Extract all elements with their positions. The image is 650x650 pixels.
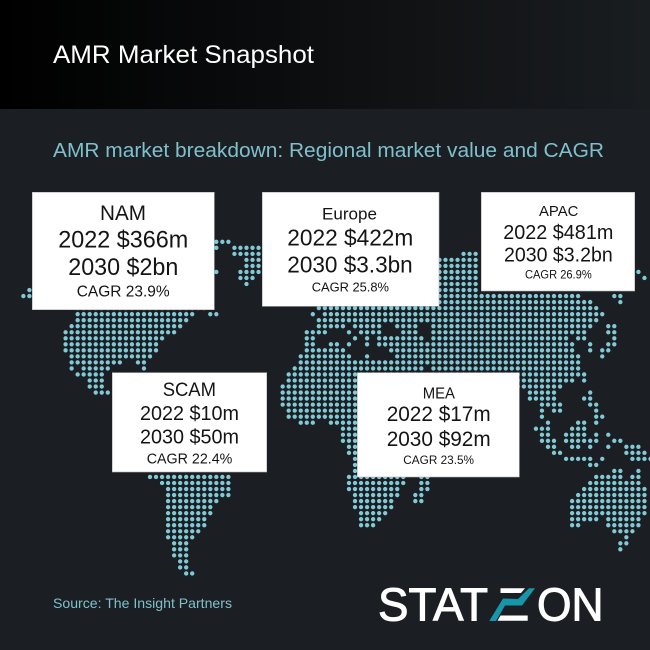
panel: APAC: CAGR 26.9% — [525, 269, 592, 281]
panel: Europe: 2022 $422m — [287, 225, 413, 251]
panel: APAC: 2030 $3.2bn — [504, 245, 613, 267]
dotted world map — [23, 242, 650, 573]
subtitle: AMR market breakdown: Regional market value and CAGR — [53, 140, 604, 162]
logo: STATZON: ON — [537, 578, 604, 630]
panel: NAM — [32, 192, 214, 310]
panel: Europe: Europe — [322, 204, 377, 223]
panel: MEA: CAGR 23.5% — [403, 453, 474, 467]
panel: SCAM: CAGR 22.4% — [147, 451, 232, 467]
icon: logo Z mark — [489, 588, 535, 621]
panel: SCAM: 2022 $10m — [140, 403, 239, 425]
panel: SCAM: SCAM — [163, 380, 216, 401]
source note: Source: The Insight Partners — [53, 595, 232, 611]
panel: SCAM — [112, 373, 267, 472]
logo: STATZON: STAT — [378, 578, 488, 630]
panel: Europe — [262, 192, 439, 306]
panel: MEA: MEA — [423, 385, 456, 402]
panel: Europe: CAGR 25.8% — [312, 280, 389, 295]
panel: SCAM: 2030 $50m — [140, 427, 239, 449]
panel: APAC — [481, 192, 635, 291]
panel: NAM: NAM — [100, 202, 146, 225]
panel: NAM: 2022 $366m — [58, 226, 188, 253]
panel: NAM: 2030 $2bn — [68, 254, 178, 281]
title: AMR Market Snapshot — [53, 41, 314, 69]
panel: APAC: 2022 $481m — [503, 222, 613, 244]
panel: Europe: 2030 $3.3bn — [287, 251, 413, 277]
panel: APAC: APAC — [539, 203, 578, 220]
logo: STATZON — [378, 578, 604, 630]
panel: MEA — [357, 373, 519, 477]
header band — [0, 0, 650, 109]
panel: MEA: 2030 $92m — [387, 427, 491, 451]
panel: NAM: CAGR 23.9% — [77, 284, 170, 301]
panel: MEA: 2022 $17m — [387, 402, 491, 426]
